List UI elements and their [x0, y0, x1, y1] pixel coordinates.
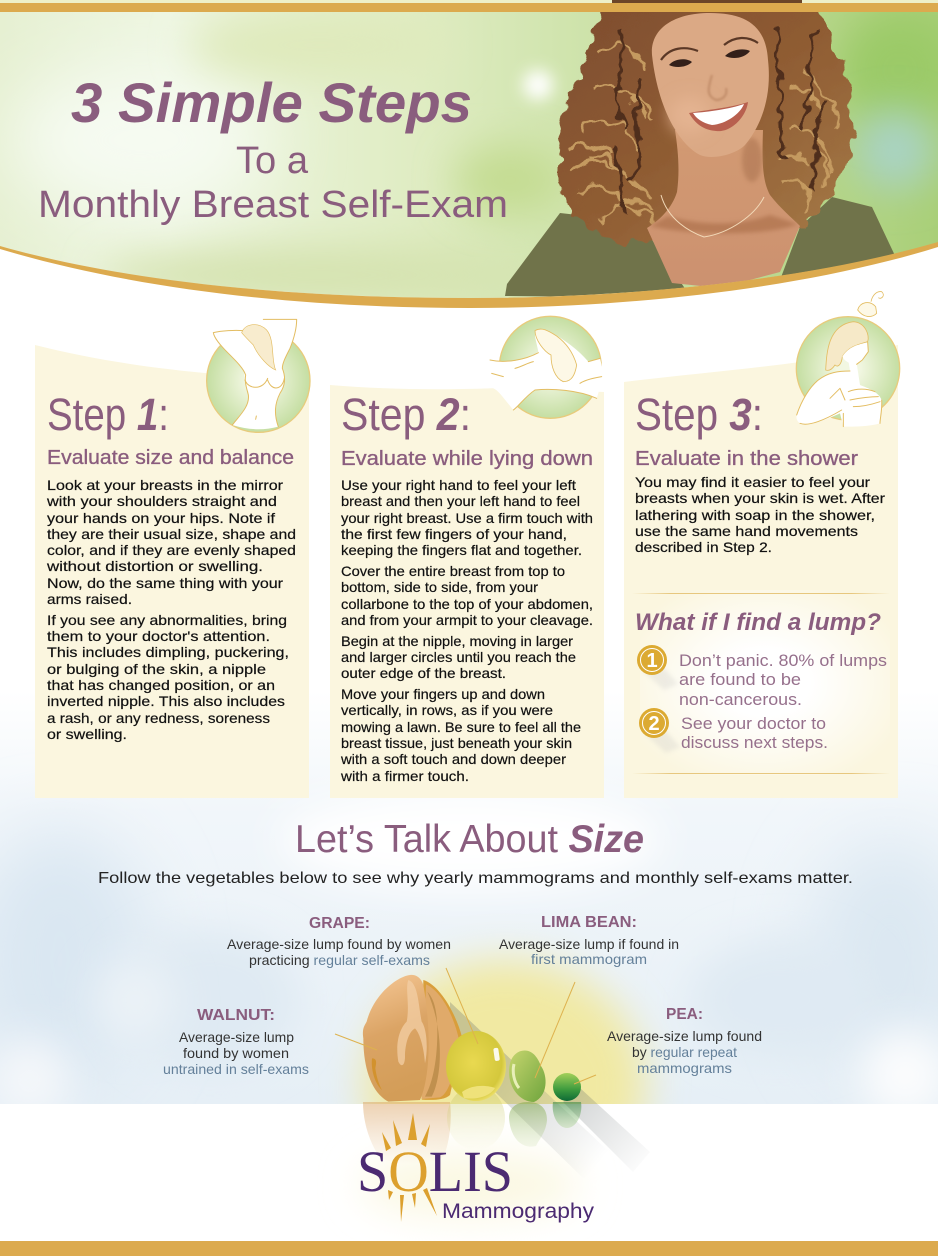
shirt [505, 197, 898, 300]
header banner [0, 4, 938, 305]
label: walnut [163, 1007, 309, 1077]
faint yellow glow under logo [360, 1153, 580, 1217]
label: pea: Average-size lump found [607, 1028, 762, 1044]
label: grape: GRAPE: [309, 915, 370, 932]
step 2 body: and larger circles until you reach the [341, 649, 576, 665]
step 2 body: Cover the entire breast from top to [341, 563, 565, 579]
step 1 heading: Step 1: [47, 389, 169, 440]
smile [689, 102, 748, 131]
step 2 body: your right breast. Use a firm touch with [341, 510, 593, 526]
label: lima bean: LIMA BEAN: [541, 914, 637, 931]
step 1 body: color, and if they are evenly shaped [47, 542, 296, 558]
step 1 body: arms raised. [47, 591, 132, 607]
step 1 body: your hands on your hips. Note if [47, 510, 275, 526]
gold top band [0, 0, 938, 12]
wordmark: Mammography [442, 1200, 595, 1223]
label: pea: PEA: [666, 1006, 703, 1023]
step 2 body: keeping the fingers flat and together. [341, 542, 582, 558]
label: pea: mammograms [637, 1060, 732, 1076]
logo: Solis Mammography [357, 1113, 595, 1223]
step 2 body: mowing a lawn. Be sure to feel all the [341, 719, 581, 735]
intro sentence: Follow the vegetables below to see why yearly mammograms and monthly self-exams matter. [98, 870, 853, 887]
icon: woman lying down [490, 316, 604, 418]
step 2 body: breast tissue, just beneath your skin [341, 735, 572, 751]
heading: let's talk about size: Let’s Talk About Size [295, 818, 644, 861]
chest and neck [647, 130, 800, 288]
vegetable: grape [446, 1031, 506, 1101]
step 2 body: Begin at the nipple, moving in larger [341, 633, 573, 649]
step 1 body: or bulging of the skin, a nipple [47, 661, 266, 677]
heading: 3 simple steps: 3 Simple Steps [71, 71, 472, 134]
step 1 body: Look at your breasts in the mirror [47, 477, 283, 493]
photo: smiling woman [505, 4, 898, 300]
label: walnut: untrained in self-exams [163, 1061, 309, 1077]
panel: step 3 [624, 292, 900, 798]
label: pea [607, 1006, 762, 1076]
label: lima bean [499, 914, 679, 967]
lump step 1 text: Don’t panic. 80% of lumps [679, 652, 887, 670]
number badge 1 [637, 645, 678, 690]
heading: to a: To a [236, 140, 309, 182]
label: walnut: WALNUT: [197, 1007, 275, 1024]
yellow glow behind vegetables [342, 936, 668, 1104]
step 2 heading: Step 2: [341, 389, 471, 440]
step 3 subheading: Evaluate in the shower [635, 448, 858, 470]
vegetable: lima bean [509, 1050, 546, 1102]
callout: what if I find a lump [632, 590, 890, 775]
lump step 2 text [681, 715, 828, 752]
label: lima bean: Average-size lump if found in [499, 936, 679, 952]
sun rays [382, 1113, 437, 1222]
step 2 body: vertically, in rows, as if you were [341, 702, 553, 718]
label: grape [227, 915, 451, 968]
lump step 1 text: are found to be [679, 671, 801, 689]
step 1 subheading: Evaluate size and balance [47, 447, 294, 469]
logo: Solis Mammography: SOLIS [357, 1139, 513, 1204]
step 1 body: with your shoulders straight and [46, 493, 277, 509]
step 1 body: a rash, or any redness, soreness [47, 710, 270, 726]
shower head [858, 303, 877, 317]
eyes and brows [661, 38, 758, 60]
step 2 body: the first few fingers of your hand, [341, 526, 567, 542]
gold swoosh under banner [0, 242, 938, 308]
icon: woman with raised arms [207, 319, 310, 432]
label: grape: Average-size lump found by women [227, 936, 451, 952]
label: lima bean: first mammogram [531, 951, 647, 967]
lower bokeh background [0, 753, 938, 1104]
lump step 2 text: See your doctor to [681, 715, 826, 733]
vegetable: walnut [363, 975, 462, 1102]
necklace [661, 195, 764, 237]
step 3 body: You may find it easier to feel your [635, 474, 870, 490]
step 2 body: with a soft touch and down deeper [340, 751, 566, 767]
vegetable shadows [450, 1002, 650, 1178]
step 1 body: without distortion or swelling. [46, 558, 263, 574]
number badge 2 [639, 708, 680, 753]
step 1 body: If you see any abnormalities, bring [47, 612, 287, 628]
lump step 1 text: non-cancerous. [679, 691, 802, 709]
step 2 body: with a firmer touch. [340, 768, 469, 784]
icon: woman in shower [796, 292, 900, 427]
label: walnut: Average-size lump [179, 1029, 294, 1045]
step 1 body: or swelling. [47, 726, 127, 742]
label: grape: practicing regular self-exams [249, 952, 430, 968]
step 3 body: lathering with soap in the shower, [635, 507, 875, 523]
step 3 body [635, 474, 885, 555]
step 2 body: breast and then your left hand to feel [341, 493, 580, 509]
label: walnut: found by women [183, 1045, 289, 1061]
callout leader lines [335, 968, 596, 1084]
step 1 body: Now, do the same thing with your [47, 575, 283, 591]
panel: step 2 [330, 316, 604, 798]
step 3 heading: Step 3: [635, 389, 763, 440]
curly hair [558, 4, 854, 243]
heading: monthly breast self-exam: Monthly Breast Self-Exam [38, 184, 508, 226]
step 2 body [340, 477, 593, 784]
label: pea: by regular repeat [632, 1044, 737, 1060]
number badge 2: 2 [648, 713, 660, 735]
step 2 body: and from your armpit to your cleavage. [341, 612, 593, 628]
step 3 body: use the same hand movements [635, 523, 858, 539]
step 2 body: Move your fingers up and down [341, 686, 545, 702]
face [652, 13, 769, 157]
step 2 subheading: Evaluate while lying down [341, 448, 593, 470]
step 1 body: This includes dimpling, puckering, [47, 644, 289, 660]
lump heading: What if I find a lump? [635, 609, 881, 636]
step 1 body: them to your doctor's attention. [47, 628, 270, 644]
step 1 body: that has changed position, or an [47, 677, 275, 693]
step 1 body: inverted nipple. This also includes [47, 693, 285, 709]
step 1 body: they are their usual size, shape and [47, 526, 296, 542]
vegetable reflections [363, 1086, 581, 1164]
step 3 body: described in Step 2. [635, 539, 772, 555]
step 2 body: outer edge of the breast. [341, 665, 506, 681]
step 3 body: breasts when your skin is wet. After [635, 490, 885, 506]
nose shadow [709, 75, 726, 100]
step 2 body: bottom, side to side, from your [341, 579, 538, 595]
number badge 1: 1 [646, 650, 658, 672]
step 1 body [46, 477, 296, 742]
gold footer band [0, 1241, 938, 1256]
lump step 2 text: discuss next steps. [681, 734, 828, 752]
lump step 1 text [679, 652, 887, 709]
step 2 body: collarbone to the top of your abdomen, [341, 596, 593, 612]
panel: step 1 [35, 319, 310, 798]
step 2 body: Use your right hand to feel your left [341, 477, 576, 493]
vegetable: pea [553, 1073, 581, 1101]
